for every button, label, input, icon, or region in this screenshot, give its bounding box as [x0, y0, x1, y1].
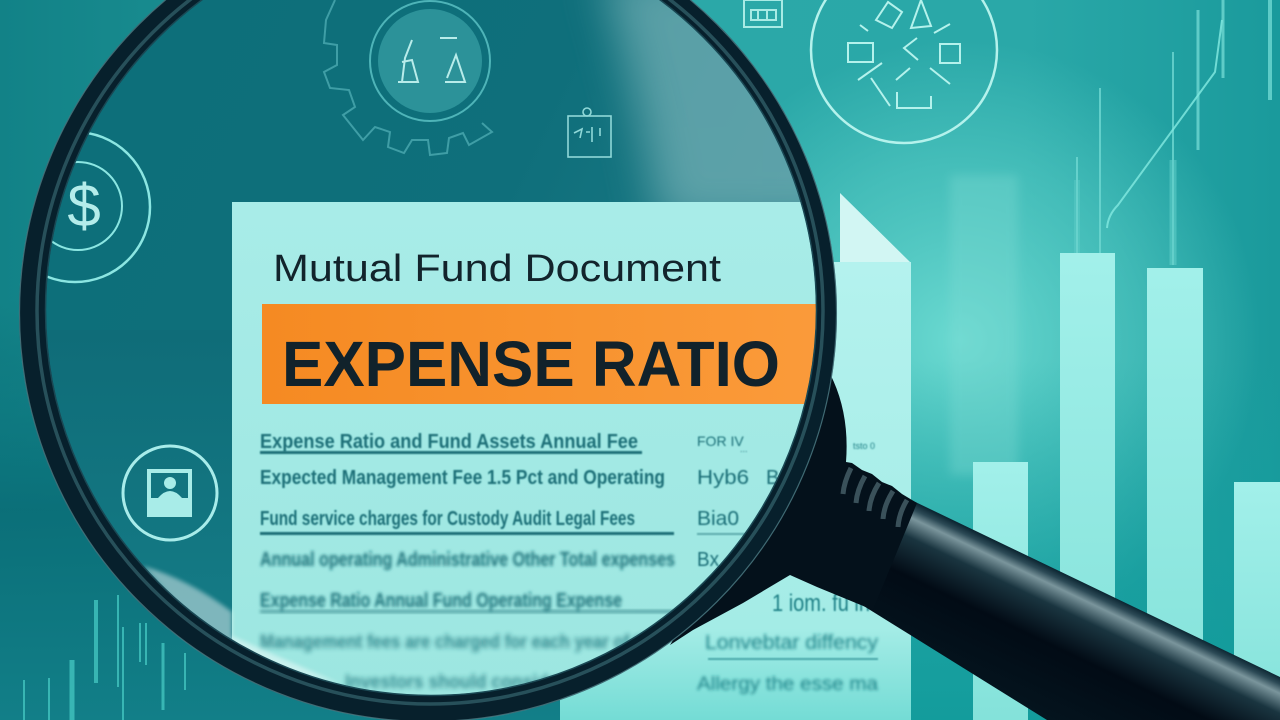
blurred document text: Fund service charges for Custody Audit Legal Fees [260, 508, 635, 530]
candlestick chart lines [1077, 0, 1270, 265]
gear icon [324, 0, 492, 155]
small chart lines bottom left [24, 595, 185, 720]
document right column text: 1 iom. fu in [772, 590, 870, 617]
lens glare [586, 0, 800, 202]
blurred document text [260, 431, 779, 693]
small document icon [568, 108, 611, 157]
document right column text: tsto 0 [853, 441, 875, 451]
blurred document text: Expected Management Fee 1.5 Pct and Operating [260, 467, 665, 489]
blurred document text: ... [740, 444, 748, 454]
document page [232, 202, 816, 695]
small icon top [744, 0, 782, 27]
dollar icon [48, 132, 152, 284]
blurred document text: FOR IV [697, 433, 744, 449]
bar chart [973, 253, 1280, 720]
lens lower-left highlight [143, 566, 340, 684]
background faint column [950, 175, 1018, 475]
magnifier ring [19, 0, 837, 720]
highlighted banner: EXPENSE RATIO [282, 328, 780, 400]
portrait icon [123, 446, 217, 540]
highlighted banner [262, 304, 862, 404]
blurred document text: B [766, 467, 779, 489]
handle collar [670, 370, 917, 645]
handle shaft [830, 497, 1280, 720]
blurred document text: Expense Ratio Annual Fund Operating Expense [260, 590, 622, 612]
document right column text [697, 441, 878, 695]
blurred document text: Bx [697, 549, 719, 571]
document behind the lens [560, 193, 911, 720]
blurred document text: Hyb6 [697, 467, 749, 489]
blurred document text: Bia0 [697, 508, 739, 530]
handle ridges [843, 468, 907, 527]
document right column text: Lonvebtar diffency [705, 632, 878, 654]
document right column text: Allergy the esse ma [697, 674, 878, 695]
document title: Mutual Fund Document [273, 248, 721, 290]
dollar icon: $ [67, 172, 101, 239]
document folded corner [840, 193, 910, 262]
magnifier handle [670, 370, 1280, 720]
blurred document text: Investors should consider all expenses [345, 672, 675, 693]
blurred document text: Management fees are charged for each year of the fund [260, 632, 700, 653]
top right icon circle [811, 0, 997, 143]
blurred document text: Expense Ratio and Fund Assets Annual Fee [260, 431, 638, 453]
blurred document text: Annual operating Administrative Other Total expenses [260, 549, 675, 571]
growth line [1107, 20, 1222, 228]
lens interior [46, 0, 816, 695]
